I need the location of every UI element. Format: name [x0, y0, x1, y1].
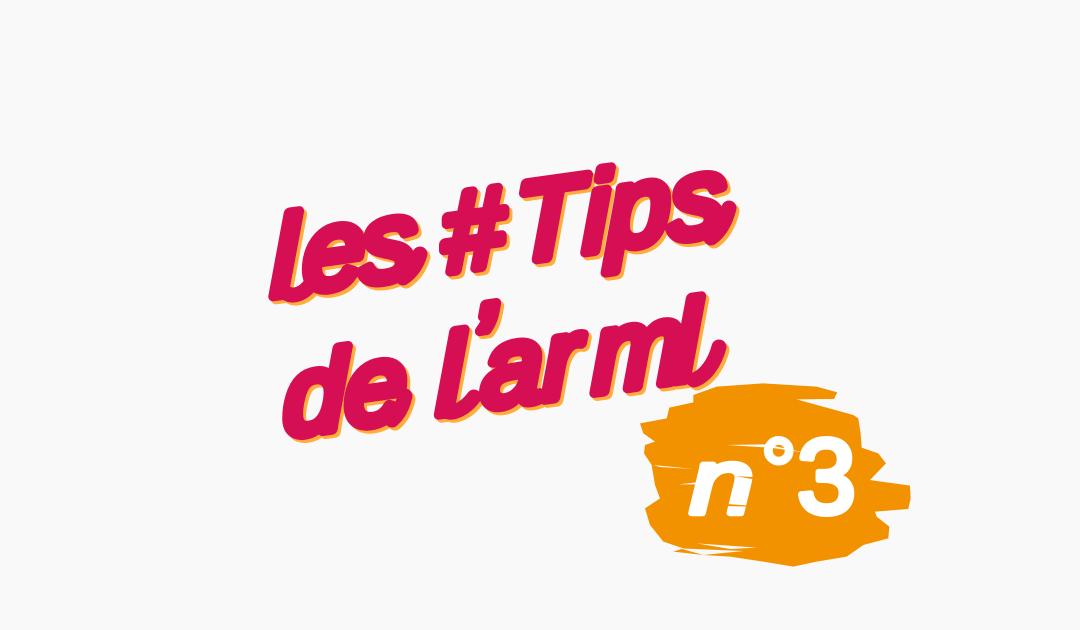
badge label: n°3	[690, 418, 856, 536]
title line 1: les #Tips	[272, 133, 725, 320]
streaks over badge label	[712, 476, 825, 507]
title: les #Tips de l'arml	[272, 133, 729, 460]
lettering swashes	[286, 208, 729, 420]
badge digit 3: 3	[797, 418, 856, 536]
badge degree sign: °	[757, 420, 794, 522]
badge letter n: n	[690, 431, 754, 533]
title line 2: de l’arml	[284, 252, 702, 460]
icon: orange brush stroke badge	[640, 383, 911, 567]
brush streaks	[653, 444, 803, 555]
brush stroke shape	[640, 383, 911, 567]
